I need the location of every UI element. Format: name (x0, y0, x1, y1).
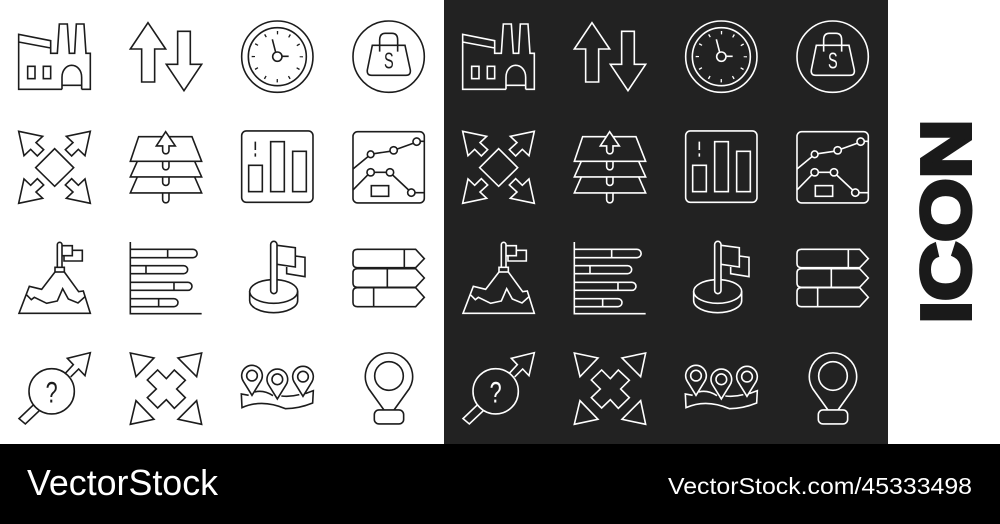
icon: stacked layers with arrow (130, 132, 202, 203)
icon: factory (19, 24, 90, 89)
icon: horizontal bar chart (130, 242, 202, 314)
icon: shopping bag in circle, inverted (797, 21, 868, 92)
icon: line chart card, inverted (797, 132, 868, 203)
icon: up and down arrows (130, 23, 202, 91)
icon: line chart card (353, 132, 424, 203)
panel: light icon grid (0, 0, 444, 444)
icon: diamond with four arrows, inverted (463, 131, 534, 203)
icon: bar chart card (242, 131, 313, 202)
icon: clock (242, 21, 313, 92)
panel: dark icon grid (444, 0, 888, 444)
icon: flag on disc, inverted (694, 241, 749, 313)
icon: flag on disc (250, 241, 305, 313)
icon: cross with four triangles, inverted (574, 353, 646, 424)
footer brand name: VectorStock (27, 462, 219, 503)
icon: shopping bag in circle (353, 21, 424, 92)
footer image id: VectorStock.com/45333498 (668, 473, 972, 499)
icon: location pin, inverted (809, 353, 857, 424)
icon: mountain with flag (19, 242, 90, 313)
title: vertical ICON: ICON (907, 120, 985, 324)
icon: question mark with arrow, inverted (463, 353, 534, 424)
footer bar (0, 444, 1000, 524)
icon: map with three pins, inverted (685, 365, 757, 409)
icon: mountain with flag, inverted (463, 242, 534, 313)
icon: stacked layers with arrow, inverted (574, 132, 646, 203)
icon: factory, inverted (463, 24, 534, 89)
icon: bar chart card, inverted (686, 131, 757, 202)
icon: question mark with arrow (19, 353, 90, 424)
icon: arrow tag rows, inverted (797, 249, 868, 307)
icon: location pin (365, 353, 413, 424)
icon: horizontal bar chart, inverted (574, 242, 646, 314)
icon: clock, inverted (686, 21, 757, 92)
icon: cross with four triangles (130, 353, 202, 424)
icon: arrow tag rows (353, 249, 424, 307)
icon: map with three pins (241, 365, 313, 409)
icon: diamond with four arrows (19, 131, 90, 203)
icon: up and down arrows, inverted (574, 23, 646, 91)
